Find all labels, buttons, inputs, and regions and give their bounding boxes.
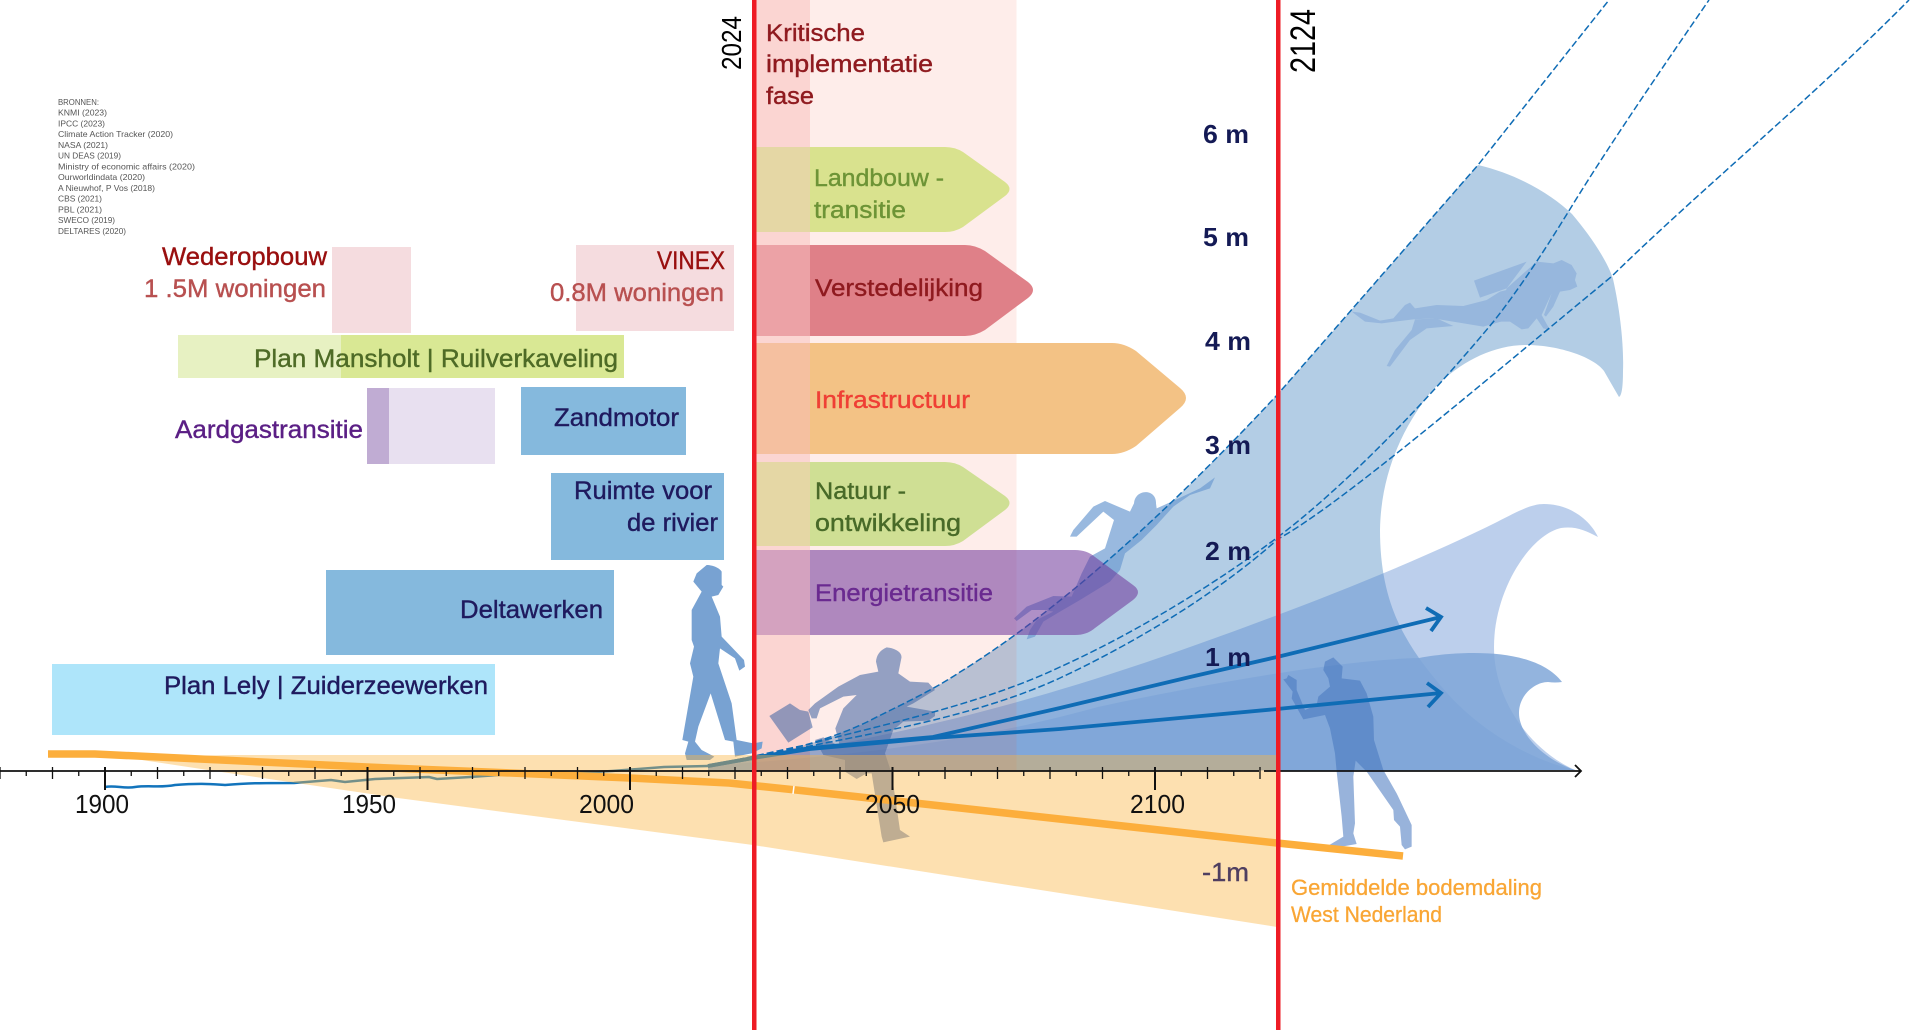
axis year labels: 2000 [579,789,634,819]
label: Aardgastransitie: Aardgastransitie [175,416,363,444]
sources list: UN DEAS (2019) [58,151,121,161]
sources list: DELTARES (2020) [58,226,126,236]
arrow: lower scenario [708,683,1441,766]
label: Landbouw-transitie [814,165,944,224]
arrow block: Infrastructuur [755,343,1186,454]
label: Plan Mansholt | Ruilverkaveling: Plan Mansholt | Ruilverkaveling [254,345,618,373]
sources list: SWECO (2019) [58,215,115,225]
label: Plan Lely | Zuiderzeewerken: Plan Lely | Zuiderzeewerken [164,672,488,700]
heading: Kritische implementatie fase: fase [766,83,814,110]
arrow block: Landbouwtransitie [755,147,1010,232]
figure: walking woman [682,565,763,760]
label: Landbouw-transitie: Landbouw - [814,165,944,192]
label: Natuur-ontwikkeling: Natuur - [815,478,906,505]
wave: large high-scenario wave [708,165,1623,771]
label: Verstedelijking: Verstedelijking [815,275,983,302]
label: VINEX [550,247,725,307]
wave: low scenario wave [708,653,1575,771]
year label 2024: 2024 [716,16,747,70]
heading: Kritische implementatie fase: implementatie [766,51,933,78]
sources list [58,97,195,236]
scenario line: dashed outer high scenario [708,0,1609,766]
axis year labels: 2100 [1130,789,1185,819]
label: -1m: -1m [1202,857,1249,887]
block: Wederopbouw period [332,247,411,333]
label: Landbouw-transitie: transitie [814,197,906,224]
heading: Kritische implementatie fase: Kritische [766,20,865,47]
label: Wederopbouw: Wederopbouw [162,243,328,271]
label: VINEX: VINEX [657,247,725,275]
block: VINEX period [576,245,734,331]
axis year labels: 2050 [865,789,920,819]
height scale labels [1203,119,1251,672]
block: Zandmotor [521,387,686,455]
band: darker critical strip [754,0,810,771]
label: Ruimte voor de rivier: de rivier [627,509,718,537]
height scale labels: 2 m [1205,536,1251,566]
sources list: Ministry of economic affairs (2020) [58,162,195,172]
block: Plan Mansholt and Ruilverkaveling [178,335,624,378]
arrow block: Verstedelijking [755,245,1033,336]
label: Gemiddelde bodemdaling West Nederland [1291,875,1542,927]
height scale labels: 6 m [1203,119,1249,149]
scenario line: dashed lower high scenario [708,0,1909,766]
label: Ruimte voor de rivier: Ruimte voor [574,477,712,505]
block: Aardgastransitie [367,388,495,464]
sources list: NASA (2021) [58,140,108,150]
label: Wederopbouw: 1 .5M woningen [144,275,326,303]
figure: swimmer [1014,477,1215,639]
axis year labels [75,789,1185,819]
line: average subsidence West Netherlands [48,754,1403,856]
heading: Kritische implementatie fase [766,20,933,110]
axis year labels: 1950 [342,789,396,819]
axis ticks [0,767,1260,779]
sources list: IPCC (2023) [58,118,105,128]
sources list: Climate Action Tracker (2020) [58,129,173,139]
height scale labels: 1 m [1205,642,1251,672]
observed sea level line [105,766,708,788]
sources list: CBS (2021) [58,194,102,204]
band: subsidence uncertainty range [122,755,1277,927]
axis major ticks [105,767,1155,790]
label: VINEX: 0.8M woningen [550,279,724,307]
wave: middle scenario wave [708,504,1598,771]
label: Ruimte voor de rivier [574,477,718,537]
sources list: A Nieuwhof, P Vos (2018) [58,183,155,193]
sources list: KNMI (2023) [58,108,107,118]
label: Energietransitie: Energietransitie [815,580,993,607]
sources list: BRONNEN: [58,97,99,107]
time axis line [0,765,1581,777]
axis year labels: 1900 [75,789,129,819]
sources list: Ourworldindata (2020) [58,172,145,182]
label: Natuur-ontwikkeling: ontwikkeling [815,510,961,537]
block: Deltawerken [326,570,614,655]
red line: 2024 [752,0,756,1030]
label: Zandmotor: Zandmotor [554,404,679,432]
band: critical implementation phase 2024-2075 [754,0,1016,771]
arrow block: Energietransitie [755,550,1138,635]
block: Ruimte voor de rivier [551,473,724,560]
height scale labels: 4 m [1205,326,1251,356]
label: Deltawerken: Deltawerken [460,596,603,624]
label: Infrastructuur: Infrastructuur [815,387,970,414]
red line: 2124 [1276,0,1280,1030]
figure: standing man [1283,657,1412,849]
arrow: 1 m scenario [708,608,1441,766]
figure: diver [1352,260,1577,367]
sources list: PBL (2021) [58,204,102,214]
arrow block: Natuurontwikkeling [755,462,1010,546]
label: Gemiddelde bodemdaling West Nederland: Gemiddelde bodemdaling [1291,875,1542,900]
label: Natuur-ontwikkeling [815,478,961,537]
height scale labels: 3 m [1205,430,1251,460]
figure: running businessman with briefcase [769,647,935,842]
block: Plan Lely Zuiderzeewerken [52,664,495,735]
scenario line: dashed middle high scenario [708,0,1709,766]
label: Wederopbouw [144,243,328,303]
label: Gemiddelde bodemdaling West Nederland: West Nederland [1291,902,1442,927]
height scale labels: 5 m [1203,222,1249,252]
